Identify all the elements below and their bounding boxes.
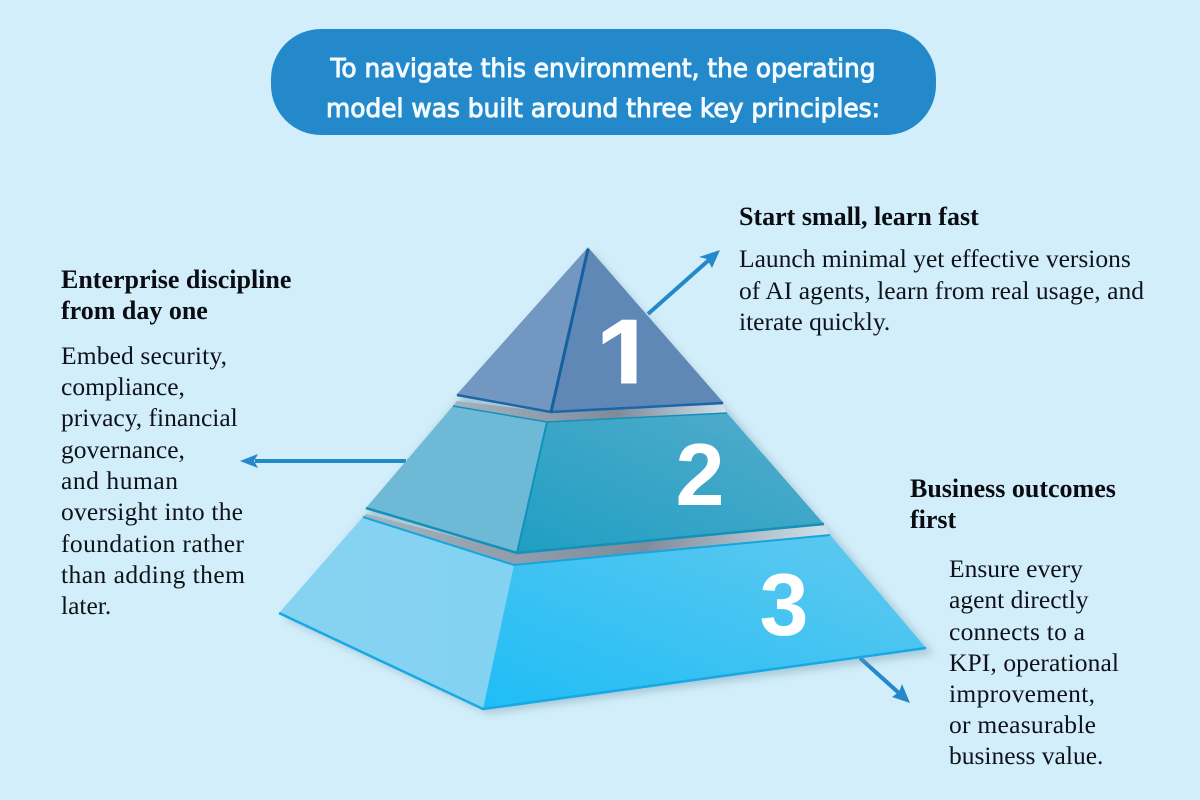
text: enterprise discipline: compliance, (61, 372, 185, 401)
header pill: To navigate this environment, the operating (330, 54, 876, 84)
tier 2 (366, 401, 824, 553)
text: enterprise discipline: foundation rather (61, 529, 244, 558)
header pill: model was built around three key principles: (326, 94, 880, 124)
tier 3 (279, 514, 926, 709)
tier 1 (457, 248, 723, 421)
text: start small, learn fast: Start small, learn fast (739, 202, 979, 231)
text: enterprise discipline: Embed security, (61, 341, 227, 370)
text: start small, learn fast: of AI agents, learn from real usage, and (739, 276, 1144, 305)
arrow: to principle 2 (240, 454, 406, 468)
text: business outcomes: KPI, operational (949, 648, 1119, 677)
number 2: 2 (676, 425, 724, 524)
text: start small, learn fast: iterate quickly. (739, 307, 890, 336)
text: business outcomes: connects to a (949, 617, 1085, 646)
header pill (271, 29, 936, 135)
text: business outcomes (910, 474, 1119, 770)
pyramid (279, 248, 934, 714)
text: business outcomes: business value. (949, 741, 1103, 770)
text: enterprise discipline: than adding them (61, 560, 245, 589)
number 3: 3 (760, 555, 808, 654)
text: enterprise discipline: later. (61, 591, 111, 620)
number 1: 1 (595, 296, 657, 421)
text: enterprise discipline: privacy, financial (61, 403, 238, 432)
text: business outcomes: Ensure every (949, 554, 1083, 583)
text: enterprise discipline (61, 265, 291, 620)
pyramid shadow (285, 252, 934, 714)
text: enterprise discipline: from day one (61, 296, 208, 325)
text: business outcomes: Business outcomes (910, 474, 1116, 503)
arrow: to principle 1 (648, 250, 720, 314)
text: business outcomes: agent directly (949, 585, 1089, 614)
text: enterprise discipline: and human (61, 466, 178, 495)
text: enterprise discipline: oversight into the (61, 497, 243, 526)
text: enterprise discipline: governance, (61, 435, 185, 464)
text: start small, learn fast: Launch minimal yet effective versions (739, 244, 1131, 273)
text: enterprise discipline: Enterprise discipline (61, 265, 291, 294)
text: business outcomes: first (910, 505, 957, 534)
text: business outcomes: improvement, (949, 679, 1095, 708)
arrow: to principle 3 (860, 658, 910, 703)
text: start small, learn fast (739, 202, 1144, 336)
text: business outcomes: or measurable (949, 710, 1096, 739)
